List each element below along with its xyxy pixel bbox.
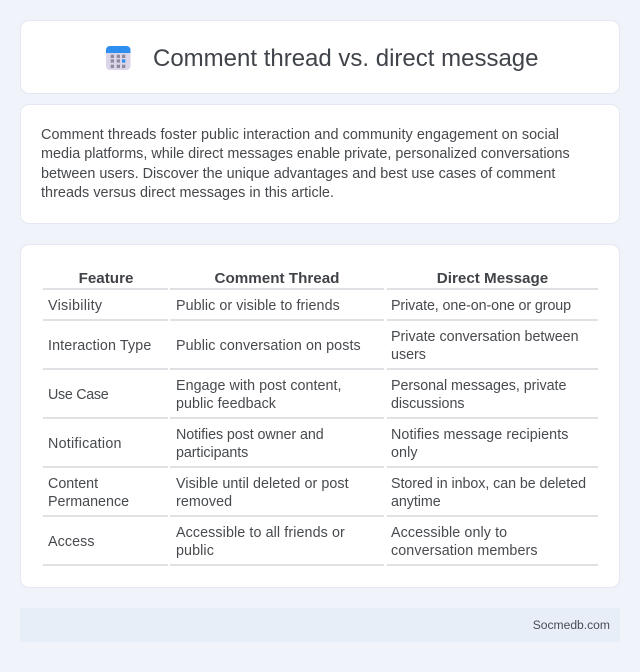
row: access: Accessible to all friends or xyxy=(176,525,345,541)
intro text: Comment threads foster public interaction and community engagement on social xyxy=(41,127,559,143)
title: Comment thread vs. direct message xyxy=(153,45,538,72)
footer bar xyxy=(20,608,620,642)
intro text: between users. Discover the unique advantages and best use cases of comment xyxy=(41,166,555,182)
row: content permanence: anytime xyxy=(391,494,441,510)
table header: Comment Thread xyxy=(215,270,339,287)
row: interaction type: Interaction Type xyxy=(48,338,151,354)
row: interaction type: Private conversation between xyxy=(391,329,579,345)
table header: Direct Message xyxy=(437,270,548,287)
row: visibility xyxy=(48,298,571,314)
row: use case xyxy=(48,378,566,412)
row: interaction type: Public conversation on posts xyxy=(176,338,361,354)
row: interaction type: users xyxy=(391,347,426,363)
row: use case: Engage with post content, xyxy=(176,378,342,394)
row: access: public xyxy=(176,543,214,559)
row: content permanence xyxy=(48,476,586,510)
row: content permanence: Visible until deleted or post xyxy=(176,476,349,492)
title card xyxy=(20,20,620,94)
row: content permanence: Content xyxy=(48,476,98,492)
row: notification xyxy=(48,427,569,461)
row: content permanence: Stored in inbox, can be deleted xyxy=(391,476,586,492)
row: content permanence: removed xyxy=(176,494,232,510)
table card xyxy=(20,244,620,588)
row: interaction type xyxy=(48,329,579,363)
row: use case: public feedback xyxy=(176,396,276,412)
intro text: threads versus direct messages in this article. xyxy=(41,185,334,201)
row: use case: Personal messages, private xyxy=(391,378,566,394)
row: content permanence: Permanence xyxy=(48,494,129,510)
row: notification: participants xyxy=(176,445,248,461)
row: notification: Notifies message recipients xyxy=(391,427,569,443)
row: access: conversation members xyxy=(391,543,538,559)
table header: Feature xyxy=(79,270,133,287)
row: access: Accessible only to xyxy=(391,525,507,541)
row: notification: only xyxy=(391,445,418,461)
intro card xyxy=(20,104,620,224)
row: use case: discussions xyxy=(391,396,464,412)
intro text xyxy=(41,127,570,201)
icon: calendar xyxy=(106,46,130,70)
intro text: media platforms, while direct messages enable private, personalized conversations xyxy=(41,146,570,162)
row: visibility: Visibility xyxy=(48,298,102,314)
row: use case: Use Case xyxy=(48,387,108,403)
row: notification: Notification xyxy=(48,436,122,452)
table header xyxy=(79,270,548,287)
row: notification: Notifies post owner and xyxy=(176,427,324,443)
row: visibility: Private, one-on-one or group xyxy=(391,298,571,314)
row: visibility: Public or visible to friends xyxy=(176,298,340,314)
row: access xyxy=(48,525,538,559)
footer text: Socmedb.com xyxy=(533,618,610,632)
row: access: Access xyxy=(48,534,95,550)
